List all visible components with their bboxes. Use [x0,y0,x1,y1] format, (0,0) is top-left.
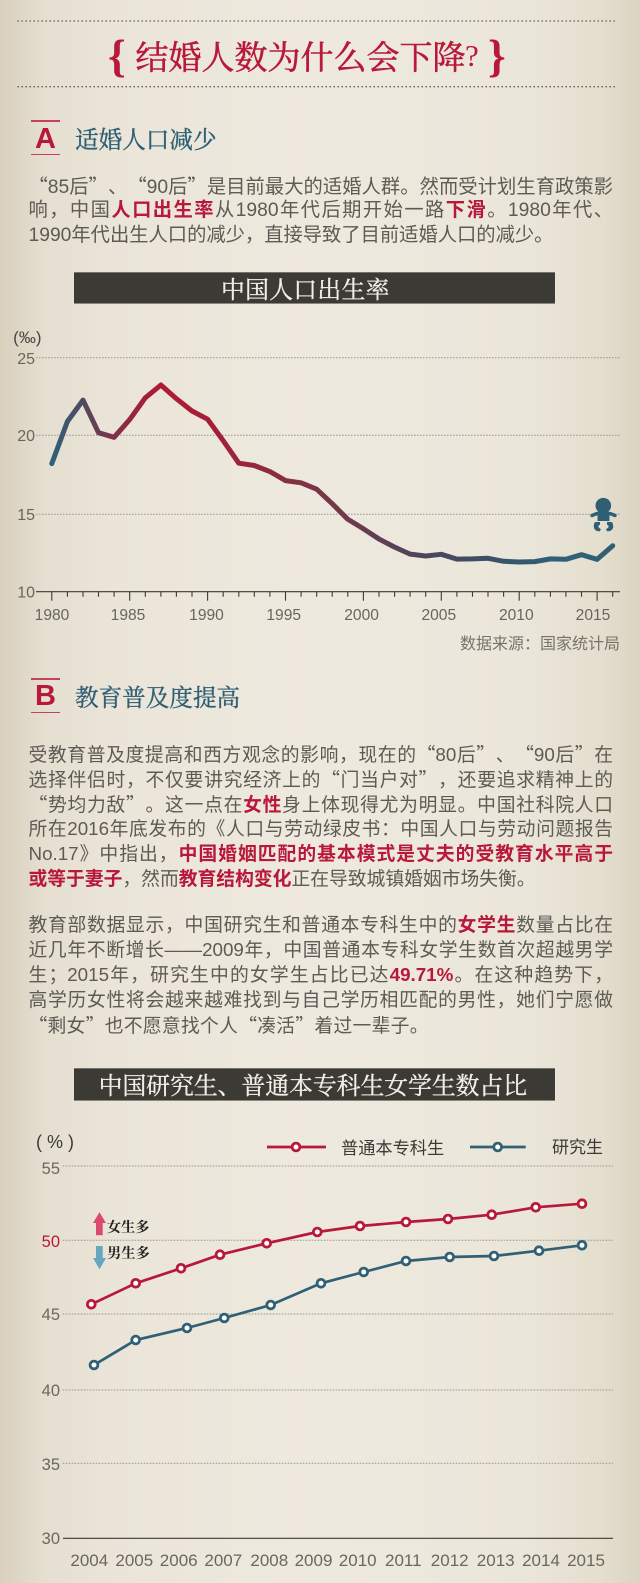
y axis labels: 50 [42,1233,60,1251]
series: graduate [90,1241,586,1369]
heading bar: birth rate chart: 中国人口出生率 [221,271,390,305]
legend: undergraduate [267,1138,444,1158]
legend: graduate: 研究生 [552,1138,603,1157]
x axis labels: 1985 [111,607,146,624]
arrow: more female: 女生多 [107,1217,150,1237]
y axis labels: 45 [42,1306,60,1324]
paragraph: female student share: “剩女”也不愿意找个人“凑活”着过一辈子。 [28,1011,429,1038]
x axis labels: 2015 [576,607,611,624]
paragraph: education and marriage: “势均力敌”。这一点在女性身上体现得尤为明显。中国社科院人口 [28,790,613,817]
y axis labels: 30 [42,1530,60,1548]
x axis labels: 2009 [295,1551,332,1570]
data source: 数据来源：国家统计局 [460,635,620,653]
y axis labels: 20 [17,428,35,445]
paragraph: section A intro: 1990年代出生人口的减少，直接导致了目前适婚人口的减少。 [28,225,553,246]
y axis labels [42,1160,60,1548]
x axis labels: 2005 [421,607,456,624]
birth rate line [52,385,613,562]
x axis labels: 2015 [567,1551,605,1570]
paragraph: female student share [28,914,613,1038]
paragraph: female student share: 生；2015年，研究生中的女学生占比已达49.71%。在这种趋势下， [28,964,613,985]
paragraph: education and marriage: 受教育普及度提高和西方观念的影响，现在的“80后”、“90后”在 [28,740,613,767]
paragraph: female student share: 高学历女性将会越来越难找到与自己学历相匹配的男性，她们宁愿做 [28,989,613,1010]
x axis labels: 1990 [189,607,224,624]
paragraph: education and marriage [28,740,613,889]
section A heading: 适婚人口减少 [75,121,217,155]
y axis labels: 35 [42,1456,60,1474]
section B heading: B [35,680,56,712]
x axis labels: 2010 [339,1551,377,1570]
paragraph: education and marriage: 或等于妻子，然而教育结构变化正在导致城镇婚姻市场失衡。 [28,868,536,889]
title: } [488,31,506,81]
y axis labels: (‰) [13,328,42,347]
legend: undergraduate: 普通本专科生 [341,1138,444,1158]
paragraph: female student share: 近几年不断增长——2009年，中国普通本专科女学生数首次超越男学 [28,939,613,960]
x axis labels: 2014 [522,1551,560,1570]
paragraph: section A intro: “85后”、“90后”是目前最大的适婚人群。然而受计划生育政策影 [28,171,613,199]
dotted rule top [18,20,615,88]
paragraph: female student share: 教育部数据显示，中国研究生和普通本专科生中的女学生数量占比在 [28,914,613,935]
title: 结婚人数为什么会下降 [136,32,466,79]
arrow: more male: 男生多 [107,1243,150,1263]
x axis [36,592,620,601]
paragraph: education and marriage: No.17》中指出，中国婚姻匹配的基本模式是丈夫的受教育水平高于 [28,843,613,864]
y axis labels: 55 [42,1160,60,1178]
title: { [108,31,126,81]
x axis labels: 2006 [160,1551,198,1570]
x axis labels: 1995 [266,607,301,624]
y axis labels: 40 [42,1382,60,1400]
paragraph: education and marriage: 选择伴侣时，不仅要讲究经济上的“门当户对”，还要追求精神上的 [28,765,613,792]
x axis labels: 2000 [344,607,379,624]
x axis labels [70,1551,605,1570]
x axis labels: 2007 [204,1551,242,1570]
x axis labels: 2012 [431,1551,469,1570]
x axis labels: 2011 [385,1551,422,1570]
arrow: more male [93,1243,150,1269]
title: ? [465,38,479,73]
x axis labels: 2013 [477,1551,515,1570]
legend: graduate [470,1138,603,1157]
x axis labels [35,607,611,624]
paragraph: education and marriage: 所在2016年底发布的《人口与劳动绿皮书：中国人口与劳动问题报告 [28,818,613,839]
x axis labels: 2008 [250,1551,288,1570]
y axis labels [13,328,42,602]
x axis labels: 2005 [115,1551,153,1570]
line chart: female student share [36,1132,613,1570]
unit label: ( % ) [36,1132,74,1152]
paragraph: section A intro: 响，中国人口出生率从1980年代后期开始一路下滑。1980年代、 [28,200,613,221]
y axis labels: 15 [17,507,35,524]
y axis labels: 25 [17,351,35,368]
heading bar: female student share chart: 中国研究生、普通本专科生女学生数占比 [99,1067,527,1101]
arrow: more female [93,1212,150,1237]
x axis labels: 2004 [70,1551,108,1570]
heading bar: birth rate chart [74,272,555,304]
line chart: China birth rate [13,328,620,653]
series: undergraduate [87,1200,586,1308]
icon: baby [592,498,615,531]
section B heading: 教育普及度提高 [75,679,240,713]
section A heading: A [35,123,56,155]
paragraph: section A intro [28,171,613,246]
x axis labels: 2010 [499,607,534,624]
y axis labels: 10 [17,584,35,602]
x axis labels: 1980 [35,607,70,624]
